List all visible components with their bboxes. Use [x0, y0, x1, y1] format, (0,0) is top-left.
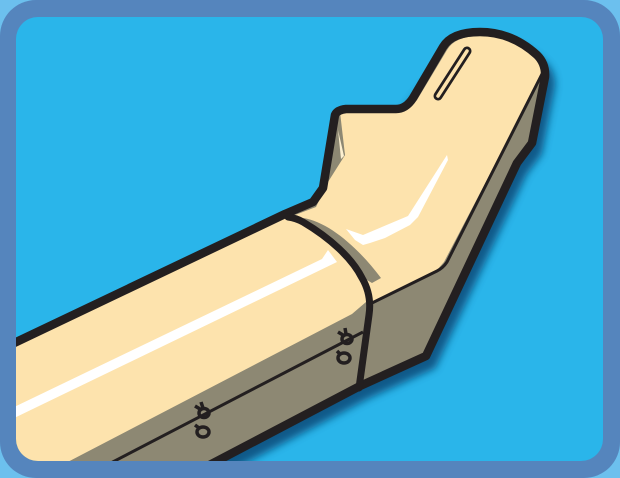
clip upper right [338, 328, 352, 344]
fold highlight [338, 130, 344, 159]
wrist band line [288, 217, 370, 388]
clip lower left [195, 425, 209, 437]
forearm highlight [10, 250, 337, 420]
slot inner [438, 51, 467, 96]
arm outline [10, 32, 545, 470]
sleeve seam line [105, 332, 363, 466]
elbow sleeve: cream [295, 36, 542, 302]
drop shadow behind arm [226, 48, 560, 461]
elbow highlight [346, 155, 448, 245]
small grey fold at elbow [340, 152, 345, 164]
sleeve cuff shadow [303, 218, 381, 283]
elbow edge line [372, 72, 543, 303]
slot outline [438, 51, 467, 96]
forearm sleeve: cream [10, 214, 368, 470]
clip upper left [195, 402, 209, 418]
clip lower right [337, 351, 350, 363]
arm underside: grey [10, 32, 545, 470]
